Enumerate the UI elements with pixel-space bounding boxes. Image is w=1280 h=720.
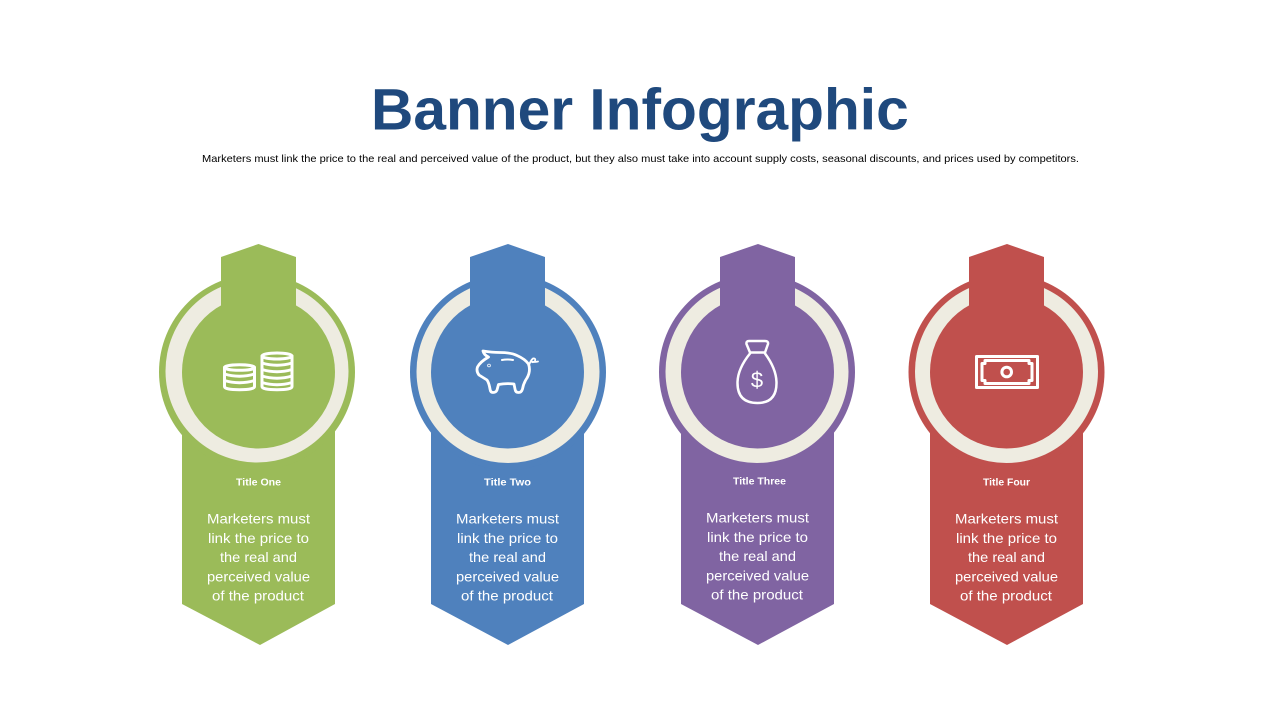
- ring: [915, 280, 1098, 463]
- body text: the real and: [469, 549, 546, 565]
- body text: Marketers must: [706, 510, 809, 526]
- inner disc and top arrow: [930, 244, 1083, 448]
- banner shape: [159, 274, 355, 645]
- banner shape: [908, 274, 1104, 645]
- inner disc and top arrow: [681, 244, 834, 448]
- body text: perceived value: [706, 568, 809, 584]
- icon: money bag: [738, 341, 776, 403]
- icon: money bag: $: [751, 368, 763, 392]
- subtitle: Marketers must link the price to the real and perceived value of the product, but they also must take into account supply costs, seasonal discounts, and prices used by competitors.: [202, 153, 1079, 165]
- heading: Title Three: [733, 476, 786, 488]
- body text: link the price to: [457, 530, 558, 546]
- body text: of the product: [711, 586, 803, 602]
- body text: [706, 510, 809, 602]
- body text: link the price to: [956, 530, 1057, 546]
- body text: [955, 510, 1058, 604]
- panel: title two (blue): [410, 244, 606, 645]
- inner disc and top arrow: [182, 244, 335, 448]
- inner disc and top arrow: [431, 244, 584, 448]
- body text: link the price to: [707, 529, 808, 545]
- body text: the real and: [719, 548, 796, 564]
- body text: the real and: [220, 549, 297, 565]
- body text: perceived value: [456, 568, 559, 584]
- title: Banner Infographic: [371, 78, 909, 142]
- body text: perceived value: [955, 568, 1058, 584]
- body text: of the product: [212, 588, 304, 604]
- body text: Marketers must: [456, 510, 559, 526]
- icon: banknote: [976, 356, 1038, 388]
- ring: [666, 280, 848, 463]
- ring: [416, 280, 600, 463]
- heading: Title One: [236, 476, 281, 488]
- heading: Title Four: [983, 476, 1030, 488]
- body text: the real and: [968, 549, 1045, 565]
- body text: of the product: [960, 588, 1052, 604]
- panel: title one (green): [159, 244, 355, 645]
- icon: piggy bank: [477, 351, 538, 392]
- panel: title three (purple): [659, 244, 855, 645]
- banner shape: [410, 274, 606, 645]
- body text: [456, 510, 559, 604]
- body text: Marketers must: [207, 510, 310, 526]
- heading: Title Two: [484, 476, 531, 488]
- body text: [207, 510, 310, 604]
- body text: link the price to: [208, 530, 309, 546]
- banner shape: [659, 274, 855, 645]
- body text: perceived value: [207, 568, 310, 584]
- ring: [166, 280, 348, 462]
- panel: title four (red): [908, 244, 1104, 645]
- body text: Marketers must: [955, 510, 1058, 526]
- icon: coins: [224, 353, 292, 390]
- body text: of the product: [461, 588, 553, 604]
